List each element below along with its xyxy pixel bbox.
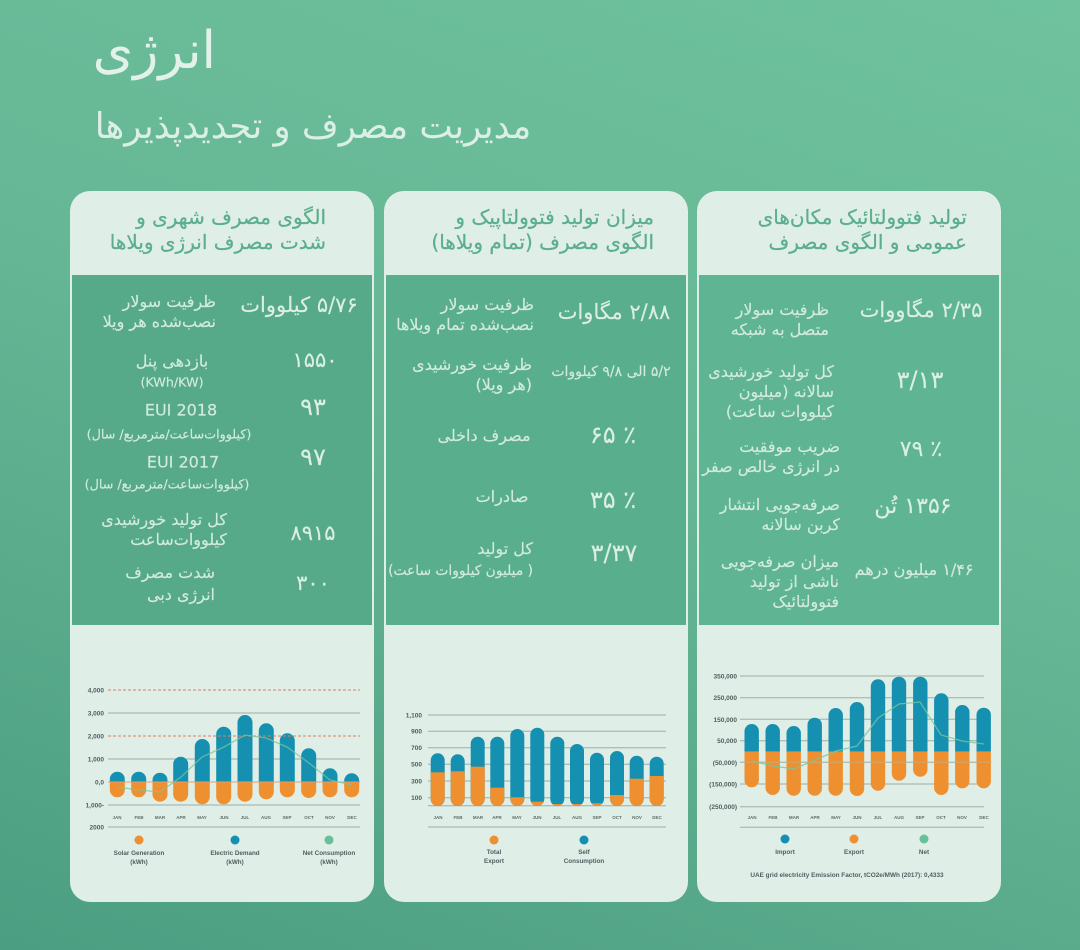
x axis labels: FEB (454, 815, 463, 820)
label: panel yield (136, 352, 208, 390)
y axis labels (86, 688, 104, 832)
title: انرژی (93, 21, 216, 81)
value: EUI 2018: ۹۳ (300, 393, 326, 421)
x axis labels: JUL (553, 815, 561, 820)
label: EUI 2018: EUI 2018 (145, 400, 217, 419)
y axis labels: 100 (411, 795, 422, 802)
x axis labels: MAR (789, 815, 800, 820)
legend: Import (775, 849, 796, 856)
chart: solar generation and electric demand (86, 688, 360, 866)
label: total generation: ( میلیون کیلووات ساعت) (388, 563, 533, 579)
y axis labels: 0,0 (95, 780, 104, 786)
emission factor note: UAE grid electricity Emission Factor, tCO2e/MWh (2017): 0,4333 (750, 872, 944, 879)
net consumption line (117, 735, 352, 792)
y axis labels: 300 (411, 778, 422, 786)
y axis labels: 1,000- (86, 802, 104, 810)
value: capacity per villa: ۵/۷۶ کیلووات (240, 293, 358, 317)
panel heading (431, 205, 654, 254)
value: total solar generation: ۸۹۱۵ (290, 521, 336, 545)
label: EUI 2017: EUI 2017 (147, 452, 219, 471)
value: installed solar capacity: ۲/۸۸ مگاوات (558, 300, 670, 324)
legend: (kWh) (320, 859, 338, 866)
label: solar capacity per villa: (هر ویلا) (475, 375, 532, 394)
panel heading: عمومی و الگوی مصرف (769, 230, 967, 254)
x axis labels: NOV (325, 815, 335, 820)
label: Dubai energy intensity: شدت مصرف (125, 563, 215, 582)
x axis labels: JUL (241, 815, 249, 820)
label: solar capacity per villa: ظرفیت سولار (123, 292, 216, 311)
label: PV financial savings (721, 552, 839, 611)
y axis labels: 4,000 (88, 688, 104, 694)
value: PV financial savings: ۱/۴۶ میلیون درهم (855, 560, 973, 579)
x axis labels: MAR (155, 815, 166, 820)
value: self consumption: ٪ ۶۵ (590, 421, 636, 449)
legend: Total (487, 849, 502, 856)
label: grid-connected capacity: متصل به شبکه (731, 320, 829, 338)
label: carbon savings (719, 494, 840, 534)
label: grid-connected capacity (731, 300, 829, 338)
x axis labels: DEC (979, 815, 989, 820)
value: exports: ٪ ۳۵ (590, 486, 636, 514)
x axis labels: MAY (831, 815, 841, 820)
label: EUI 2018: (کیلووات‌ساعت/مترمربع/ سال) (87, 426, 251, 441)
label: total solar generation (101, 510, 228, 549)
panel heading: شدت مصرف انرژی ویلاها (110, 230, 326, 254)
x axis labels (747, 815, 989, 820)
y axis labels (406, 712, 422, 802)
label: PV financial savings: ناشی از تولید (750, 572, 839, 591)
y axis labels: 900 (411, 728, 422, 736)
y axis labels: 150,000 (714, 717, 737, 724)
x axis labels: OCT (304, 815, 314, 820)
x axis labels (433, 815, 662, 820)
data band (72, 275, 372, 625)
label: grid-connected capacity: ظرفیت سولار (736, 300, 829, 318)
x axis labels: MAY (197, 815, 207, 820)
legend: Export (484, 858, 505, 865)
label: exports: صادرات (476, 487, 528, 506)
label: installed solar capacity: ظرفیت سولار (441, 295, 534, 314)
y axis labels: (250,000) (709, 804, 737, 811)
label: solar capacity per villa (103, 292, 216, 331)
y axis labels: (50,000) (713, 760, 737, 767)
x axis labels: OCT (612, 815, 622, 820)
x axis labels: JAN (747, 815, 757, 820)
label: EUI 2018 (87, 400, 251, 442)
y axis labels: 1,000 (88, 756, 104, 764)
panel: public buildings PV generation (697, 191, 1001, 902)
y axis labels: 1,100 (406, 712, 422, 720)
label: panel yield: بازدهی پنل (136, 352, 208, 370)
label: carbon savings: کربن سالانه (761, 514, 840, 534)
x axis labels: NOV (957, 815, 967, 820)
legend (114, 836, 355, 866)
label: PV financial savings: فتوولتائیک (772, 592, 839, 611)
x axis labels: MAR (473, 815, 484, 820)
label: annual solar generation (708, 362, 834, 421)
x axis labels: FEB (768, 815, 778, 820)
panel heading: الگوی مصرف شهری و (136, 205, 326, 229)
panel heading (110, 205, 326, 254)
value: net zero success factor: ٪ ۷۹ (900, 437, 942, 462)
label: annual solar generation: کیلووات ساعت) (726, 402, 834, 421)
legend: Self (578, 849, 591, 856)
x axis labels: SEP (592, 815, 602, 820)
legend: Electric Demand (210, 850, 260, 857)
x axis labels: JUN (852, 815, 862, 820)
y axis labels: 350,000 (714, 674, 737, 680)
legend: Consumption (564, 858, 604, 865)
panel: urban consumption pattern (70, 191, 374, 902)
label: annual solar generation: کل تولید خورشیدی (708, 362, 834, 381)
chart: import and export (709, 674, 992, 879)
x axis labels: MAY (512, 815, 522, 820)
panel: villas PV generation (384, 191, 688, 902)
panel heading: الگوی مصرف (تمام ویلاها) (431, 230, 654, 254)
label: self consumption: مصرف داخلی (437, 426, 531, 445)
net line (752, 702, 984, 769)
x axis labels: SEP (915, 815, 925, 820)
y axis labels: (150,000) (709, 782, 737, 788)
x axis labels: DEC (652, 815, 662, 820)
y axis labels: 500 (411, 762, 422, 768)
data band (386, 275, 686, 625)
x axis labels: AUG (894, 815, 904, 820)
value: total generation: ۳/۳۷ (591, 539, 637, 567)
label: EUI 2017: (کیلووات‌ساعت/مترمربع/ سال) (85, 476, 249, 491)
label: net zero success factor (701, 437, 840, 476)
x axis labels: AUG (572, 815, 582, 820)
chart bars (744, 676, 991, 796)
chart bars (110, 715, 360, 804)
x axis labels: APR (492, 815, 502, 820)
y axis labels: 2,000 (88, 734, 104, 740)
x axis labels: JAN (433, 815, 443, 820)
label: solar capacity per villa: نصب‌شده هر ویلا (103, 312, 216, 331)
legend (484, 836, 604, 865)
label: total generation (388, 539, 534, 579)
label: annual solar generation: سالانه (میلیون (739, 382, 834, 401)
x axis labels: DEC (347, 815, 357, 820)
x axis labels: FEB (134, 815, 144, 820)
chart bars (430, 728, 664, 806)
label: total solar generation: کل تولید خورشیدی (101, 510, 227, 529)
label: solar capacity per villa (412, 355, 532, 394)
label: PV financial savings: میزان صرفه‌جویی (721, 552, 839, 571)
x axis labels: JUN (219, 815, 229, 820)
legend: (kWh) (130, 859, 148, 866)
x axis labels: AUG (261, 815, 271, 820)
value: Dubai energy intensity: ۳۰۰ (296, 571, 330, 595)
value: EUI 2017: ۹۷ (300, 443, 326, 471)
panel heading: میزان تولید فتوولتاپیک و (455, 205, 654, 229)
x axis labels: SEP (282, 815, 292, 820)
label: installed solar capacity (396, 295, 534, 334)
subtitle: مدیریت مصرف و تجدیدپذیرها (95, 106, 531, 147)
legend: Solar Generation (114, 850, 165, 857)
label: total generation: کل تولید (477, 539, 533, 558)
value: capacity range: ۵/۲ الی ۹/۸ کیلووات (551, 364, 671, 380)
panel heading (758, 205, 967, 254)
label: solar capacity per villa: ظرفیت خورشیدی (412, 355, 532, 374)
x axis labels: APR (810, 815, 820, 820)
legend (775, 834, 930, 856)
label: Dubai energy intensity: انرژی دبی (147, 585, 215, 604)
x axis labels: JUN (532, 815, 542, 820)
label: panel yield: (KWh/KW) (140, 374, 204, 390)
label: total solar generation: کیلووات‌ساعت (130, 530, 227, 549)
value: carbon savings: ۱۳۵۶ تُن (874, 494, 952, 519)
data band (699, 275, 999, 625)
x axis labels: NOV (632, 815, 642, 820)
x axis labels: APR (176, 815, 186, 820)
y axis labels: 700 (411, 745, 422, 752)
label: EUI 2017 (85, 452, 249, 492)
panel heading: تولید فتوولتائیک مکان‌های (758, 205, 967, 229)
value: annual solar generation: ۳/۱۳ (897, 366, 943, 394)
label: net zero success factor: ضریب موفقیت (739, 437, 840, 456)
y axis labels: 3,000 (88, 710, 104, 718)
label: installed solar capacity: نصب‌شده تمام ویلاها (396, 315, 534, 334)
legend: Net Consumption (303, 850, 355, 857)
x axis labels: JUL (874, 815, 882, 820)
label: net zero success factor: در انرژی خالص صفر (702, 457, 840, 476)
legend: (kWh) (226, 859, 244, 866)
x axis labels (112, 815, 357, 820)
value: grid-connected capacity: ۲/۳۵ مگاووات (860, 298, 982, 322)
y axis labels (709, 674, 737, 811)
value: panel yield: ۱۵۵۰ (292, 348, 338, 372)
label: carbon savings: صرفه‌جویی انتشار (720, 494, 840, 514)
legend: Export (844, 849, 865, 856)
legend: Net (919, 849, 930, 856)
label: Dubai energy intensity (125, 563, 215, 604)
x axis labels: JAN (112, 815, 122, 820)
y axis labels: 250,000 (714, 695, 737, 702)
y axis labels: 50,000 (717, 738, 737, 745)
x axis labels: OCT (936, 815, 946, 820)
chart: export and self consumption (406, 712, 666, 865)
y axis labels: 2000 (90, 824, 104, 832)
